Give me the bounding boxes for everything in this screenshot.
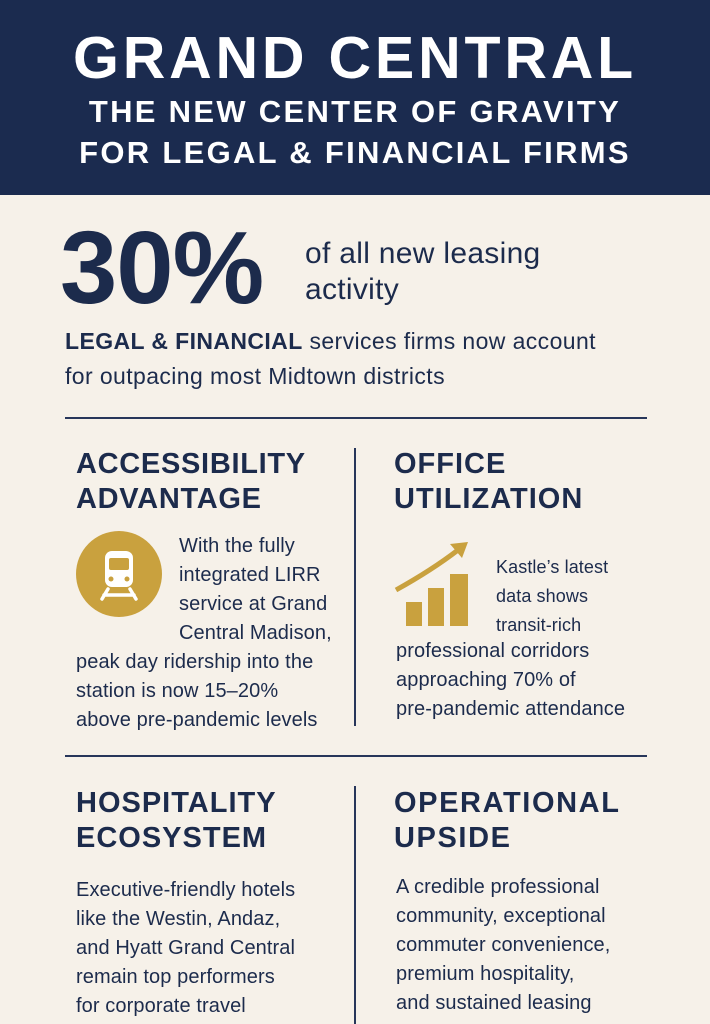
heading: OPERATIONAL (394, 787, 621, 819)
panel: operational upside (394, 787, 621, 1014)
text: like the Westin, Andaz, (76, 908, 280, 930)
text: and Hyatt Grand Central (76, 937, 295, 959)
text: Executive-friendly hotels (76, 879, 295, 901)
text: for corporate travel (76, 995, 246, 1017)
text: service at Grand (179, 593, 327, 615)
panel: office utilization: pre-pandemic attendance (396, 698, 625, 720)
stat description: for outpacing most Midtown districts (65, 363, 445, 389)
icon: bar chart arrow (394, 542, 468, 626)
stat label: of all new leasing (305, 237, 541, 270)
text: With the fully (179, 535, 295, 557)
text: integrated LIRR (179, 564, 321, 586)
heading (76, 787, 277, 854)
panel: office utilization (394, 448, 625, 720)
text: remain top performers (76, 966, 275, 988)
panel: accessibility advantage (76, 448, 332, 731)
text (76, 879, 295, 1017)
text: A credible professional (396, 876, 600, 898)
panel: accessibility advantage: peak day ridership into the (76, 651, 313, 673)
stat label (305, 237, 541, 306)
text: commuter convenience, (396, 934, 610, 956)
text: community, exceptional (396, 905, 606, 927)
title: GRAND CENTRAL (73, 25, 637, 91)
heading: ADVANTAGE (76, 483, 262, 515)
heading: UPSIDE (394, 822, 512, 854)
text (179, 535, 332, 644)
panel: hospitality ecosystem (76, 787, 295, 1017)
heading (394, 787, 621, 854)
heading: OFFICE (394, 448, 506, 480)
panel: accessibility advantage: above pre-pandemic levels (76, 709, 318, 731)
big stat 30%: 30% (60, 210, 263, 325)
subtitle: FOR LEGAL & FINANCIAL FIRMS (79, 135, 631, 170)
heading: UTILIZATION (394, 483, 583, 515)
stat label: activity (305, 273, 399, 306)
text: transit-rich (496, 615, 581, 635)
heading: HOSPITALITY (76, 787, 277, 819)
subtitle (79, 94, 631, 170)
text: Kastle’s latest (496, 557, 608, 577)
text: Central Madison, (179, 622, 332, 644)
text (496, 557, 608, 635)
heading (394, 448, 583, 515)
stat description (65, 328, 596, 389)
heading: ECOSYSTEM (76, 822, 267, 854)
text: data shows (496, 586, 588, 606)
heading: ACCESSIBILITY (76, 448, 306, 480)
panel: accessibility advantage: station is now 15–20% (76, 680, 278, 702)
heading (76, 448, 306, 515)
panel: office utilization: professional corridors (396, 640, 589, 662)
icon: train (76, 531, 162, 617)
text: premium hospitality, (396, 963, 574, 985)
header banner (0, 0, 710, 195)
stat description: LEGAL & FINANCIAL services firms now account (65, 328, 596, 354)
text: and sustained leasing (396, 992, 592, 1014)
panel: office utilization: approaching 70% of (396, 669, 576, 691)
subtitle: THE NEW CENTER OF GRAVITY (89, 94, 621, 129)
text (396, 876, 610, 1014)
